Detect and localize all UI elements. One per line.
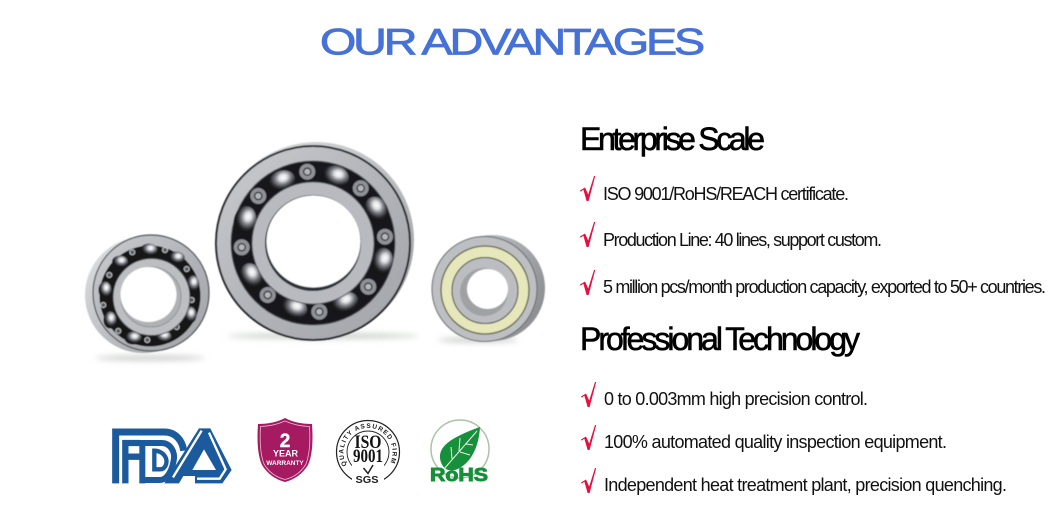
heading: Professional Technology: Professional Technology (580, 321, 860, 357)
logo: ISO 9001 SGS: 9001 (353, 446, 383, 467)
logo: FDA (116, 428, 232, 483)
cage plates (234, 164, 393, 320)
logo: ISO 9001 SGS: SGS (356, 475, 379, 486)
list item: production capacity: 5 million pcs/month production capacity, exported to 50+ countries. (603, 277, 1046, 297)
logo: ISO 9001 SGS: ISO (354, 432, 382, 453)
list item: production line (580, 222, 882, 250)
bearing: shielded bearing with yellow seal, right (432, 235, 545, 343)
list item: ISO certificate (580, 176, 849, 204)
list item: heat treatment: Independent heat treatment plant, precision quenching. (604, 475, 1007, 495)
logo: 2 year warranty shield: 2 (280, 431, 290, 452)
logo: 2 year warranty shield: WARRANTY (266, 460, 304, 467)
bearing: large open bearing, centre (216, 142, 419, 340)
list item: production line: Production Line: 40 lines, support custom. (603, 230, 882, 250)
logo: 2 year warranty shield (258, 418, 312, 482)
bearing: small open bearing, left (85, 235, 209, 361)
heading: Enterprise Scale: Enterprise Scale (580, 121, 765, 157)
title: OUR ADVANTAGES (320, 22, 703, 62)
logo: RoHS leaf (430, 420, 489, 485)
logo: ISO 9001 SGS (336, 420, 400, 486)
list item: precision control: 0 to 0.003mm high precision control. (604, 389, 868, 409)
logo: RoHS leaf: RoHS (430, 465, 488, 485)
list item: precision control (581, 382, 868, 409)
logo: 2 year warranty shield: YEAR (273, 448, 298, 458)
list item: inspection equipment (581, 425, 947, 452)
logo: ISO 9001 SGS: QUALITY ASSURED FIRM (339, 423, 398, 466)
list item: ISO certificate: ISO 9001/RoHS/REACH certificate. (603, 184, 849, 204)
list item: inspection equipment: 100% automated quality inspection equipment. (604, 432, 947, 452)
